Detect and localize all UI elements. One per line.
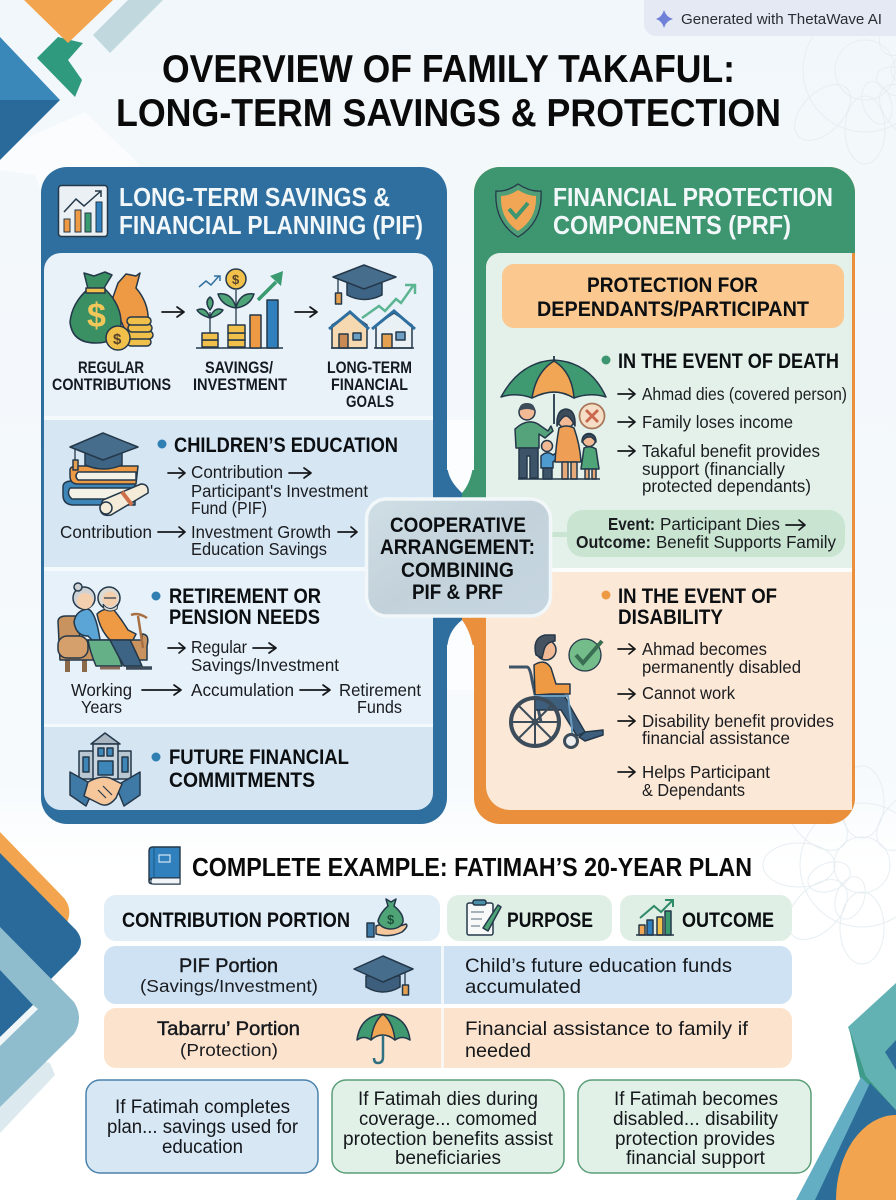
step labels: REGULAR	[78, 359, 144, 377]
section: retirement or pension needs: RETIREMENT OR	[169, 585, 321, 608]
section: retirement or pension needs: PENSION NEEDS	[169, 606, 320, 629]
arrow	[295, 307, 317, 317]
flow text: Fund (PIF)	[191, 498, 267, 518]
step labels: CONTRIBUTIONS	[52, 376, 171, 394]
icon: clipboard	[467, 900, 501, 935]
outcome box: becomes disabled: protection provides	[615, 1129, 775, 1150]
bullet list: Helps Participant	[642, 762, 770, 782]
panel heading: LONG-TERM SAVINGS &	[119, 182, 390, 212]
section: children's education	[60, 433, 398, 559]
example heading: COMPLETE EXAMPLE: FATIMAH’S 20-YEAR PLAN	[192, 854, 752, 882]
section backgrounds	[486, 253, 852, 810]
header cell: outcome: OUTCOME	[682, 909, 774, 932]
icon: growth chart	[58, 186, 108, 236]
bullet list: Ahmad becomes	[642, 639, 767, 659]
section: complete example	[86, 847, 811, 1173]
heading box: protection for dependants/participant: DEPENDANTS/PARTICIPANT	[537, 298, 809, 321]
arrow	[162, 307, 184, 317]
outcome box: completes plan: plan... savings used for	[107, 1117, 299, 1138]
callout: event and outcome: Event:	[608, 514, 655, 534]
badge: generated with ThetaWave AI: Generated with ThetaWave AI	[681, 12, 882, 28]
icon: money bags and coins	[70, 272, 153, 350]
background decoration: mandala lower right	[763, 766, 896, 964]
icon: umbrella	[357, 1014, 410, 1063]
heading box: protection for dependants/participant: PROTECTION FOR	[587, 274, 758, 297]
icon: sparkle	[656, 10, 673, 28]
outcome box: becomes disabled	[578, 1080, 811, 1173]
table header	[104, 895, 792, 941]
icon: growing savings	[196, 269, 283, 348]
table row: Tabarru portion	[104, 1008, 792, 1068]
step labels: FINANCIAL	[331, 376, 408, 394]
callout: event and outcome: Outcome:	[576, 532, 651, 552]
bullet list: & Dependants	[642, 780, 745, 800]
icon: graduation cap and houses	[329, 265, 415, 348]
bullet list: Disability benefit provides	[642, 711, 834, 731]
flow text: Savings/Investment	[191, 655, 339, 675]
section: children's education: CHILDREN’S EDUCATION	[174, 434, 398, 457]
table row: Tabarru portion: (Protection)	[180, 1040, 278, 1060]
outcome box: completes plan: education	[162, 1137, 243, 1158]
outcome box: becomes disabled: financial support	[626, 1148, 766, 1169]
panel heading: FINANCIAL PLANNING (PIF)	[119, 210, 423, 240]
background decoration: top-left shapes	[0, 0, 163, 240]
step labels: GOALS	[346, 393, 394, 411]
flow text: Education Savings	[191, 539, 327, 559]
flow text: Funds	[357, 697, 402, 717]
table row: Tabarru portion: Tabarru’ Portion	[157, 1018, 300, 1040]
icon: money bags and coins: $	[87, 297, 106, 335]
center box: cooperative arrangement: PIF & PRF	[412, 581, 503, 604]
table row: PIF portion: (Savings/Investment)	[140, 976, 318, 996]
step labels: LONG-TERM	[327, 359, 412, 377]
outcome box: completes plan	[86, 1080, 318, 1173]
center box: cooperative arrangement: COOPERATIVE	[390, 514, 526, 537]
heading box: protection for dependants/participant	[502, 264, 844, 328]
bullet list	[618, 639, 834, 800]
section: in the event of disability	[509, 585, 834, 800]
icon: hand holding money bag	[367, 899, 407, 937]
outcome box: dies during coverage: protection benefits assist	[343, 1129, 554, 1150]
center box: cooperative arrangement	[366, 499, 550, 616]
flow text: Participant's Investment	[191, 481, 368, 501]
panel heading: COMPONENTS (PRF)	[553, 210, 791, 240]
icon: growing savings: $	[232, 272, 240, 287]
table row: Tabarru portion: needed	[465, 1040, 531, 1062]
bullet list: Family loses income	[642, 412, 793, 432]
table row: PIF portion	[104, 946, 792, 1004]
step labels: INVESTMENT	[193, 376, 287, 394]
outcome box: becomes disabled: disabled... disability	[613, 1109, 778, 1130]
badge: generated with ThetaWave AI	[644, 0, 896, 36]
flow text: Working	[71, 680, 132, 700]
outcome box: dies during coverage: coverage... comomed	[359, 1109, 537, 1130]
flow text: Investment Growth	[191, 522, 331, 542]
center box: cooperative arrangement: COMBINING	[401, 559, 514, 582]
panel heading	[119, 182, 423, 240]
section: future financial commitments	[70, 733, 349, 806]
outcome box: dies during coverage: beneficiaries	[395, 1148, 501, 1169]
step labels: SAVINGS/	[205, 359, 273, 377]
icon: money bags and coins: $	[113, 331, 122, 348]
icon: shield with check	[496, 184, 541, 237]
bullet list: support (financially	[642, 459, 785, 479]
title	[116, 48, 781, 135]
flow text	[60, 462, 368, 559]
bullet list: Takaful benefit provides	[642, 441, 820, 461]
connector between panels	[447, 420, 486, 690]
section: future financial commitments: COMMITMENTS	[169, 769, 315, 792]
icon: hand holding money bag: $	[387, 912, 395, 927]
table row: PIF portion: Child’s future education funds	[465, 955, 732, 977]
header cell: contribution portion	[104, 895, 440, 941]
icon: building and handshake	[70, 733, 140, 806]
table row: PIF portion: PIF Portion	[179, 955, 278, 977]
bullet list: protected dependants)	[642, 476, 811, 496]
callout: event and outcome	[548, 510, 845, 557]
title: OVERVIEW OF FAMILY TAKAFUL:	[162, 48, 735, 91]
header cell: contribution portion: CONTRIBUTION PORTION	[122, 909, 350, 932]
bullet list: permanently disabled	[642, 657, 801, 677]
table row: Tabarru portion: Financial assistance to family if	[465, 1018, 749, 1040]
header cell: outcome	[620, 895, 792, 941]
outcome box: dies during coverage: If Fatimah dies during	[358, 1089, 538, 1110]
center box: cooperative arrangement: ARRANGEMENT:	[380, 536, 535, 559]
panel: financial protection components	[474, 167, 855, 824]
background decoration: bottom-right shapes	[796, 983, 896, 1200]
header cell: purpose: PURPOSE	[507, 909, 593, 932]
icon: person in wheelchair	[509, 635, 603, 748]
icon: book	[149, 847, 180, 884]
bullet list: financial assistance	[642, 728, 790, 748]
background decoration: bottom-left shapes	[0, 832, 81, 1133]
flow text: Years	[81, 697, 122, 717]
section: in the event of disability: DISABILITY	[618, 606, 723, 629]
section: in the event of disability: IN THE EVENT OF	[618, 585, 777, 608]
flow text: Contribution	[191, 462, 283, 482]
icon: books, cap and diploma	[63, 433, 148, 515]
icon: elderly couple on sofa	[58, 583, 152, 672]
bullet list: Ahmad dies (covered person)	[642, 384, 847, 404]
callout: event and outcome: Benefit Supports Family	[656, 532, 836, 552]
outcome box: completes plan: If Fatimah completes	[115, 1097, 290, 1118]
section: in the event of death: IN THE EVENT OF DEATH	[618, 350, 839, 373]
title: LONG-TERM SAVINGS & PROTECTION	[116, 92, 781, 135]
section: future financial commitments: FUTURE FINANCIAL	[169, 746, 349, 769]
section: retirement or pension needs	[58, 583, 421, 717]
section backgrounds	[44, 253, 433, 810]
icon: family under umbrella	[501, 356, 606, 479]
bullet list: Cannot work	[642, 683, 735, 703]
icon: graduation cap	[354, 956, 413, 995]
flow text	[71, 637, 421, 717]
outcome box: becomes disabled: If Fatimah becomes	[614, 1089, 778, 1110]
flow text: Retirement	[339, 680, 421, 700]
panel heading: FINANCIAL PROTECTION	[553, 182, 833, 212]
bullet list	[618, 384, 847, 496]
step labels	[52, 359, 412, 411]
flow text: Regular	[191, 637, 247, 657]
flow text: Contribution	[60, 522, 152, 542]
panel: long-term savings and financial planning	[41, 167, 447, 824]
icon: bar chart	[636, 900, 674, 935]
table row: PIF portion: accumulated	[465, 976, 581, 998]
outcome box: dies during coverage	[332, 1080, 564, 1173]
background decoration: mandala top right	[784, 0, 896, 164]
panel heading	[553, 182, 833, 240]
flow text: Accumulation	[191, 680, 294, 700]
header cell: purpose	[447, 895, 612, 941]
callout: event and outcome: Participant Dies	[660, 514, 780, 534]
section: in the event of death	[501, 350, 847, 557]
